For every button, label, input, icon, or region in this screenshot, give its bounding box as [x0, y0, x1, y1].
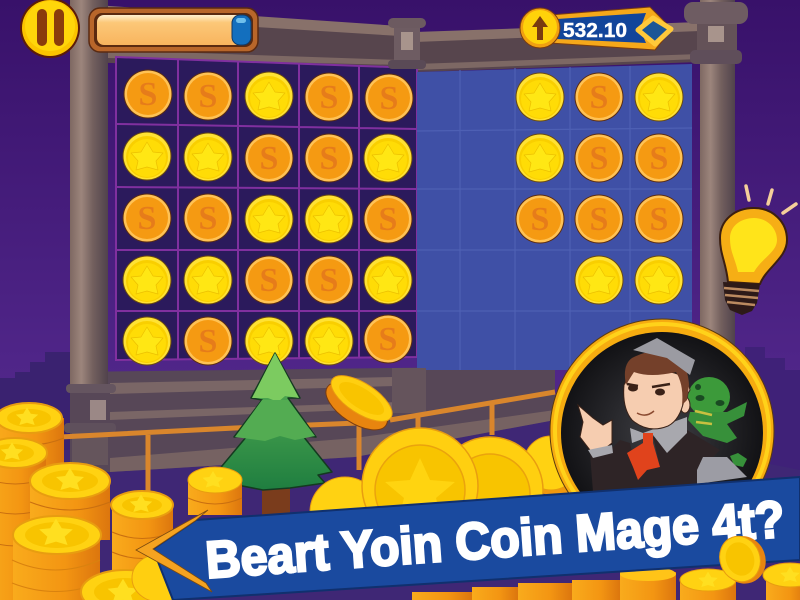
coins: left board: S	[199, 200, 217, 237]
coins: left board: S	[260, 140, 278, 177]
pointing hand	[578, 405, 612, 450]
stack D	[111, 491, 173, 575]
coins: left board: S	[379, 201, 397, 238]
collar	[630, 417, 687, 453]
small stack behind tree	[188, 467, 242, 515]
coins: left board: S	[379, 321, 397, 358]
coins: left board	[122, 70, 414, 366]
ear	[680, 397, 690, 413]
tilted falling coin	[318, 367, 399, 439]
coins: right board: S	[531, 201, 549, 238]
stack C	[30, 463, 110, 540]
tilted coin	[713, 529, 772, 590]
panel: right blue board	[417, 64, 692, 370]
stepped silhouette left	[0, 352, 70, 470]
face	[624, 370, 690, 429]
railing	[60, 392, 555, 495]
stack A	[0, 403, 64, 470]
man	[578, 338, 747, 492]
floor	[0, 420, 800, 600]
up arrow coin	[520, 8, 560, 48]
bottom right coins over banner	[680, 529, 800, 600]
pause button	[20, 0, 80, 58]
coins: left board: S	[199, 78, 217, 115]
coins: left board: S	[138, 200, 156, 237]
tree	[217, 353, 332, 515]
score display	[520, 7, 672, 50]
right column	[684, 0, 748, 345]
coins: right board: S	[590, 201, 608, 238]
sleeve	[697, 457, 747, 484]
coins: left board: S	[199, 323, 217, 360]
bottom right coin stacks	[412, 567, 676, 600]
big foreground coins	[310, 428, 583, 547]
hair	[625, 351, 689, 405]
stepped silhouette right	[745, 347, 800, 480]
title banner	[136, 477, 800, 600]
coins: left board: S	[260, 262, 278, 299]
frame: top and bottom beams	[70, 4, 700, 472]
cap	[633, 338, 695, 375]
stack E	[12, 516, 101, 600]
coins: right board: S	[590, 140, 608, 177]
coins: right board: S	[590, 79, 608, 116]
score value: 532.10	[563, 20, 627, 42]
coins: left board: S	[320, 262, 338, 299]
centre post	[388, 18, 426, 413]
panel: left purple coin grid	[116, 57, 417, 360]
diamond icon	[638, 18, 671, 44]
vest	[590, 430, 720, 492]
coin pile: left stacks	[0, 403, 173, 600]
stack F	[81, 570, 169, 600]
progress bar	[89, 8, 258, 52]
necktie	[627, 433, 660, 480]
cuff	[588, 445, 613, 458]
portrait medallion	[550, 319, 774, 543]
stack front 1	[680, 569, 736, 600]
coins: right board	[516, 72, 684, 304]
stack front 2	[763, 563, 800, 600]
coins: right board: S	[650, 201, 668, 238]
coins: left board: S	[320, 79, 338, 116]
coins: left board: S	[139, 76, 157, 113]
coins: left board: S	[320, 140, 338, 177]
left column	[64, 0, 116, 465]
yellow coins under banner tip	[132, 554, 188, 600]
stack B	[0, 438, 47, 600]
light bulb hint	[720, 186, 796, 315]
green creature	[688, 377, 747, 467]
coins: left board: S	[380, 80, 398, 117]
coins: right board: S	[650, 140, 668, 177]
